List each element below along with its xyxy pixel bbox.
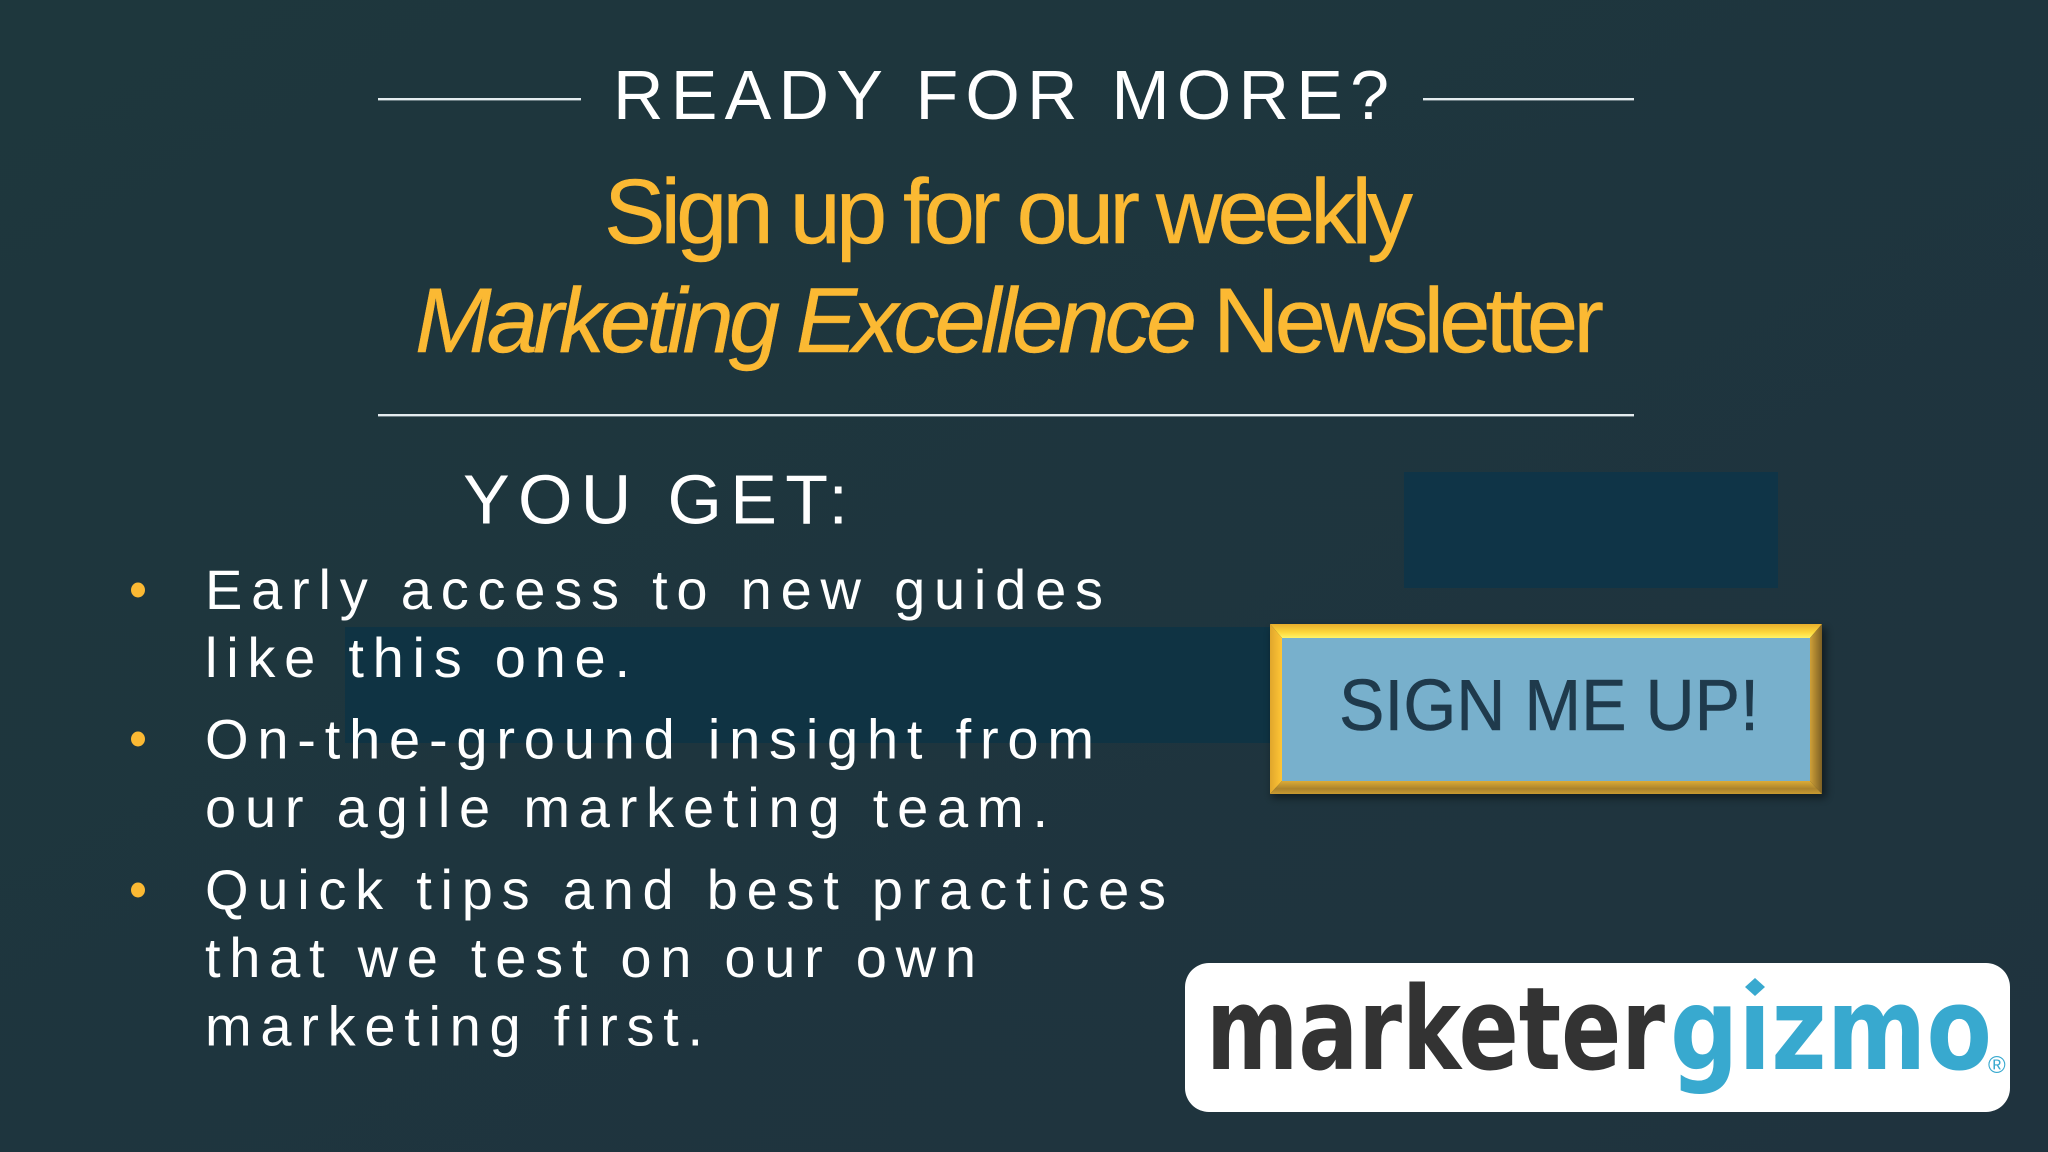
bullet 3: that we test on our own — [205, 926, 976, 989]
headline: newsletter name: Newsletter — [1213, 270, 1604, 372]
dark accent panel: behind bullets — [345, 627, 1275, 743]
bullet 2: our agile marketing team. — [205, 776, 1048, 839]
bullet 2: On-the-ground insight from — [205, 708, 1094, 770]
you get heading: YOU GET: — [463, 460, 848, 538]
sign me up button — [1270, 624, 1826, 798]
horizontal divider — [378, 414, 1634, 416]
marketergizmo logo: marketer — [1206, 963, 1665, 1097]
bullet 1: Early access to new guides — [205, 558, 1103, 621]
headline: newsletter name — [415, 270, 1604, 372]
header: ready for more with side rules: READY FOR MORE? — [613, 56, 1389, 134]
sign me up button: SIGN ME UP! — [1339, 666, 1759, 746]
dark accent panel: upper right — [1404, 472, 1778, 588]
marketergizmo logo: ® — [1988, 1052, 2006, 1079]
headline: sign up: Sign up for our weekly — [604, 161, 1413, 263]
bullet 3: Quick tips and best practices — [205, 858, 1166, 921]
headline: newsletter name: Marketing Excellence — [415, 270, 1197, 372]
bullet 1 — [131, 558, 1103, 689]
marketergizmo logo — [1185, 963, 2010, 1112]
bullet 2 — [131, 708, 1094, 839]
bullet 3 — [131, 858, 1166, 1058]
bullet 3: marketing first. — [205, 994, 703, 1058]
bullet 1: like this one. — [205, 626, 630, 689]
bullet list — [131, 558, 1166, 1058]
marketergizmo logo: gizmo — [1670, 963, 1992, 1097]
